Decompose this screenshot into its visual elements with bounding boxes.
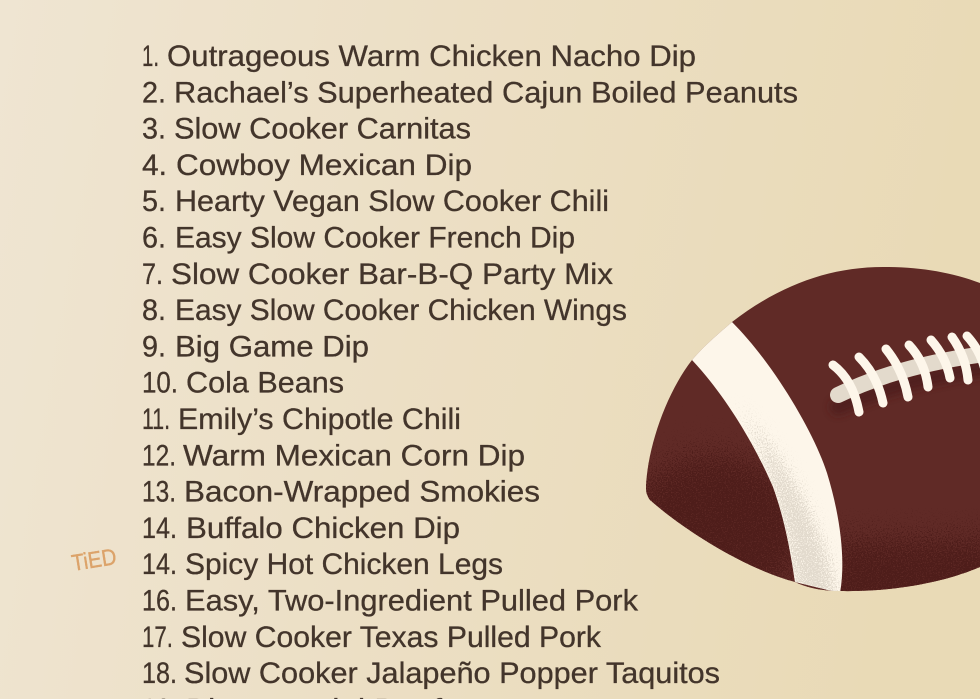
- laces: [833, 336, 980, 412]
- item 10: Cola Beans: [186, 367, 344, 400]
- item 4: Cowboy Mexican Dip: [176, 149, 472, 182]
- item 16: Easy, Two-Ingredient Pulled Pork: [185, 584, 639, 618]
- item 9: 9.: [142, 330, 166, 363]
- item 6: Easy Slow Cooker French Dip: [175, 222, 575, 254]
- item 13: 13.: [142, 476, 176, 509]
- item 8: Easy Slow Cooker Chicken Wings: [175, 294, 627, 327]
- item 14: Buffalo Chicken Dip: [186, 512, 460, 545]
- item 7: 7.: [142, 258, 163, 291]
- item 10: 10.: [142, 367, 178, 400]
- item 12: Warm Mexican Corn Dip: [183, 439, 525, 472]
- item 2: Rachael’s Superheated Cajun Boiled Peanuts: [174, 76, 798, 109]
- item 11: Emily’s Chipotle Chili: [178, 403, 461, 436]
- tied annotation: TiED: [70, 543, 118, 576]
- item 17: Slow Cooker Texas Pulled Pork: [181, 621, 602, 654]
- item 14 tied: Spicy Hot Chicken Legs: [185, 548, 503, 581]
- ranked recipe list: [142, 40, 798, 699]
- item 3: 3.: [142, 113, 166, 146]
- item 9: Big Game Dip: [175, 330, 369, 363]
- item 13: Bacon-Wrapped Smokies: [184, 476, 540, 509]
- item 11: 11.: [142, 403, 170, 436]
- item 5: Hearty Vegan Slow Cooker Chili: [175, 185, 609, 218]
- item 8: 8.: [142, 294, 166, 327]
- item 4: 4.: [142, 149, 167, 182]
- item 2: 2.: [142, 76, 166, 109]
- item 6: 6.: [142, 222, 166, 254]
- item 18: Slow Cooker Jalapeño Popper Taquitos: [184, 657, 720, 690]
- item 12: 12.: [142, 439, 176, 472]
- item 18: 18.: [142, 657, 177, 690]
- icon: football: [646, 267, 980, 592]
- item 7: Slow Cooker Bar-B-Q Party Mix: [171, 258, 613, 291]
- item 14 tied: 14.: [142, 548, 177, 581]
- item 16: 16.: [142, 584, 177, 618]
- item 1: 1.: [142, 40, 159, 73]
- item 17: 17.: [142, 621, 173, 654]
- item 1: Outrageous Warm Chicken Nacho Dip: [167, 40, 696, 73]
- item 14: 14.: [142, 512, 177, 545]
- item 5: 5.: [142, 185, 166, 218]
- item 3: Slow Cooker Carnitas: [174, 113, 471, 146]
